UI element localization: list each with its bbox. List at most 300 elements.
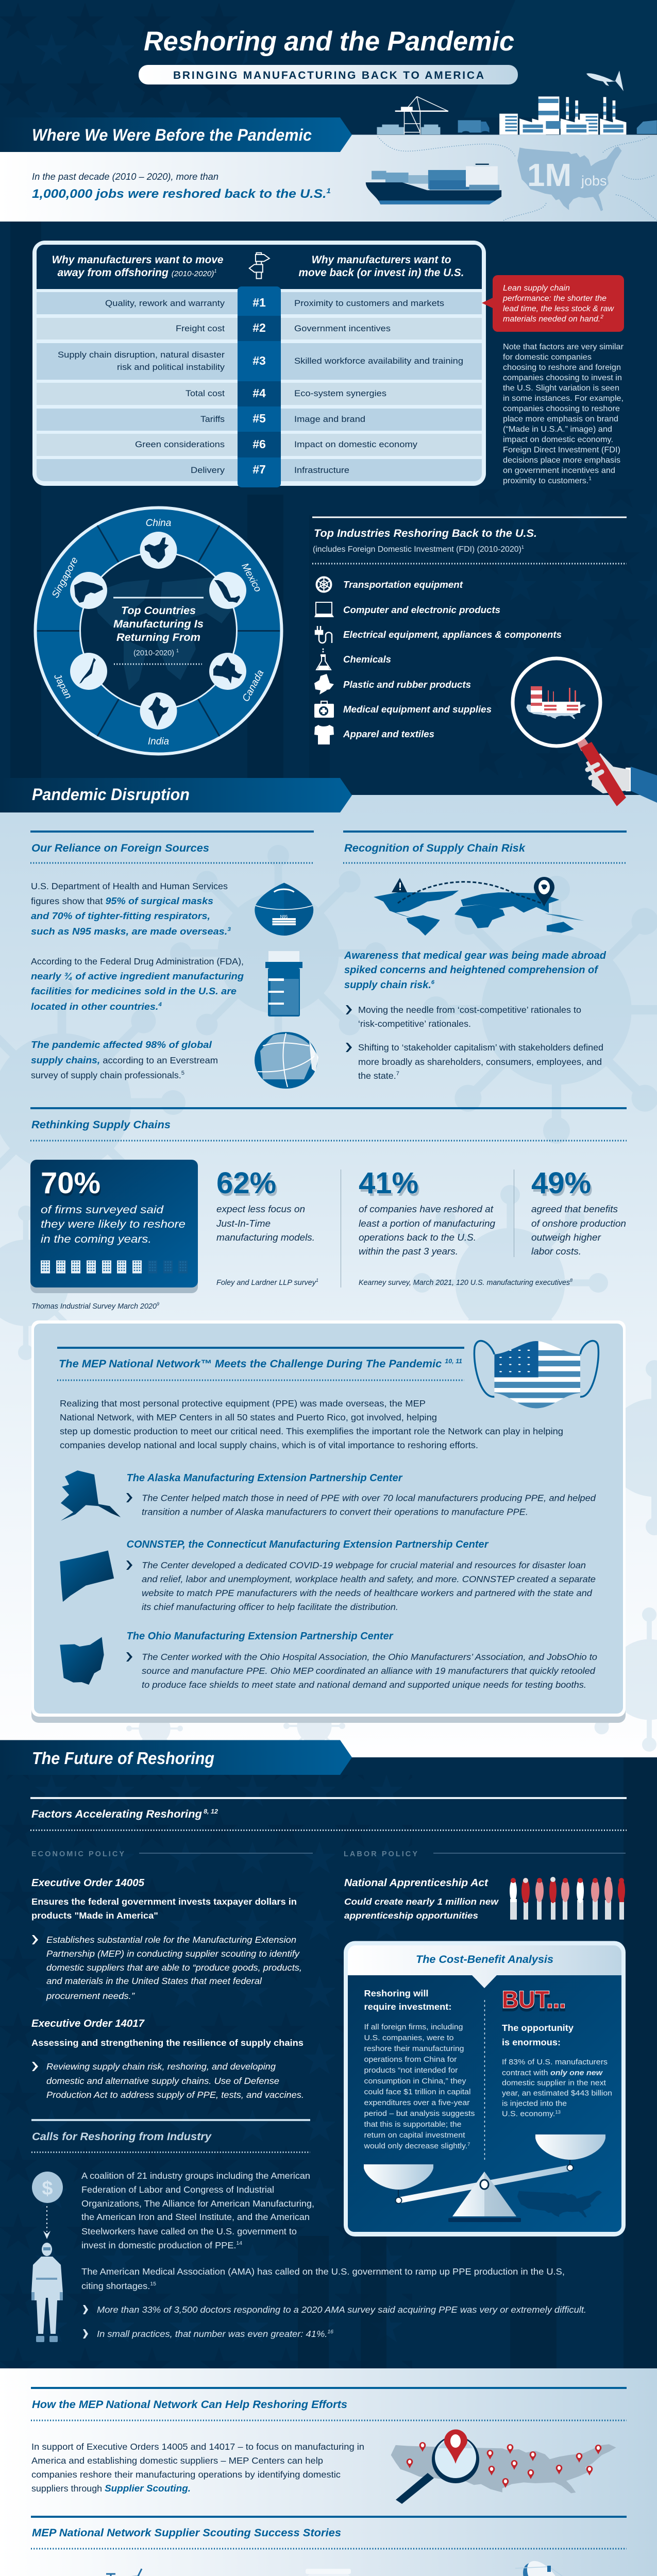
illustration: magnifying glass over U.S. factory bbox=[513, 658, 657, 806]
text: American Medical Association bbox=[81, 2266, 565, 2291]
dark section background: future of reshoring bbox=[0, 1757, 657, 2368]
illustration: vial on Virginia bbox=[242, 2569, 402, 2576]
subtitle pill bbox=[139, 65, 518, 84]
text: surgical masks statistic: 3 bbox=[227, 926, 231, 933]
statistic: 41 percent: least a portion of manufacturing bbox=[359, 1218, 495, 1229]
rank column: #1 bbox=[252, 296, 266, 309]
list: top industries: Transportation equipment bbox=[343, 579, 463, 590]
heading: calls for reshoring from industry bbox=[31, 2119, 310, 2153]
text: note on factors: decisions place more emphasis bbox=[503, 456, 620, 465]
wheel centre title: Top Countries bbox=[121, 605, 196, 617]
rank column: #7 bbox=[252, 463, 266, 476]
heading band: where we were before the pandemic: Where We Were Before the Pandemic bbox=[32, 126, 312, 144]
reasons to move back to the U.S.: Impact on domestic economy bbox=[294, 439, 418, 449]
text: active ingredient statistic: 4 bbox=[158, 1002, 162, 1008]
panel heading: 10, 11 bbox=[445, 1358, 462, 1365]
text: note on factors: in some instances. For example, bbox=[503, 394, 624, 403]
text: awareness of medical gear risk: 6 bbox=[431, 979, 435, 986]
table header bbox=[37, 245, 482, 289]
wheel centre title: Returning From bbox=[116, 632, 200, 643]
text: supplier scouting: America and establishing domestic suppliers – MEP Centers can help bbox=[31, 2455, 323, 2466]
center: CONNSTEP: website to match PPE manufacturers with the needs of healthcare workers and partnered with the state and bbox=[142, 1588, 593, 1598]
text: industry coalition: the American Iron and Steel Institute, and the American bbox=[81, 2212, 310, 2222]
panel intro text: National Network, with MEP Centers in all 50 states and Puerto Rico, got involved, helping bbox=[60, 1412, 437, 1422]
illustration: balance scale bbox=[364, 2134, 605, 2222]
heading: top industries: 1 bbox=[521, 545, 524, 550]
heading band: the future of reshoring bbox=[0, 1740, 352, 1775]
policy: executive order 14005: procurement needs.” bbox=[46, 1991, 135, 2001]
icon: wheel bbox=[316, 577, 331, 591]
panel intro text bbox=[60, 1398, 563, 1450]
rank column: #6 bbox=[252, 437, 266, 451]
light section background: pandemic disruption bbox=[0, 795, 657, 1757]
intro text: one million jobs: 1,000,000 jobs were reshored back to the U.S. bbox=[32, 187, 300, 201]
wheel centre title: Manufacturing Is bbox=[113, 618, 204, 630]
reasons to move back to the U.S.: Skilled workforce availability and training bbox=[294, 356, 463, 366]
panel heading: The MEP National Network™ Meets the Challenge During The Pandemic bbox=[59, 1358, 428, 1370]
title: Reshoring and the Pandemic bbox=[144, 26, 514, 57]
reasons to move back to the U.S.: Infrastructure bbox=[294, 465, 349, 475]
center: Ohio MEP: The Center worked with the Ohio Hospital Association, the Ohio Manufacturers’ Association, and JobsOhio to bbox=[142, 1652, 597, 1662]
rank column: #4 bbox=[252, 386, 266, 400]
policy: executive order 14017 bbox=[31, 2018, 304, 2100]
text: surgical masks statistic: figures show that 95% of surgical masks bbox=[31, 895, 213, 906]
center: Alaska MEP: The Center helped match those in need of PPE with over 70 local manufacturers producing PPE, and helped bbox=[142, 1493, 596, 1503]
statistic: 41 percent: of companies have reshored at bbox=[359, 1204, 494, 1214]
heading: how the MEP National Network can help: How the MEP National Network Can Help Reshoring Efforts bbox=[32, 2399, 347, 2411]
text: industry coalition: A coalition of 21 industry groups including the American bbox=[81, 2171, 310, 2181]
list: top industries bbox=[343, 579, 562, 739]
source: Kearney survey: 8 bbox=[570, 1278, 572, 1283]
text: 98 percent of global supply chains bbox=[31, 1039, 218, 1080]
bullet: small practices: In small practices, that number was even greater: 41%. bbox=[97, 2329, 317, 2339]
text: industry coalition: invest in domestic production of PPE. bbox=[81, 2240, 231, 2250]
heading band: where we were before the pandemic bbox=[0, 117, 352, 152]
text: surgical masks statistic: and 70% of tighter-fitting respirators, bbox=[31, 910, 210, 921]
callout: lean supply chain: performance: the shorter the bbox=[502, 294, 607, 303]
reasons to move away from offshoring bbox=[58, 298, 225, 475]
text: active ingredient statistic: located in other countries. bbox=[31, 1001, 150, 1012]
heading: recognition of supply chain risk bbox=[343, 831, 627, 863]
callout: lean supply chain: Lean supply chain bbox=[503, 284, 570, 293]
subtitle pill: BRINGING MANUFACTURING BACK TO AMERICA bbox=[173, 70, 484, 81]
list: top industries: Chemicals bbox=[343, 654, 391, 665]
icon: dollar coin: $ bbox=[42, 2178, 53, 2199]
reasons to move away from offshoring: Green considerations bbox=[135, 439, 225, 449]
policy: executive order 14017: Production Act to address supply of PPE, tests, and vaccines. bbox=[46, 2090, 304, 2100]
reasons to move away from offshoring: risk and political instability bbox=[117, 362, 225, 372]
policy: national apprenticeship act: National Apprenticeship Act bbox=[344, 1877, 488, 1889]
policy: national apprenticeship act: apprenticeship opportunities bbox=[344, 1910, 478, 1921]
text: active ingredient statistic: nearly ¾ of active ingredient manufacturing bbox=[31, 971, 244, 981]
arrow: coin to health worker bbox=[43, 2206, 50, 2239]
statistic: 62 percent: manufacturing models. bbox=[216, 1232, 315, 1243]
right column: the opportunity is enormous: is injected into the bbox=[502, 2099, 567, 2108]
table rows bbox=[37, 292, 482, 481]
bullet: stakeholder capitalism: more broadly as shareholders, consumers, employees, and bbox=[358, 1057, 602, 1067]
heading: factors accelerating reshoring bbox=[30, 1797, 627, 1830]
country labels: Singapore bbox=[50, 555, 80, 600]
illustration: bicycle on Ohio bbox=[77, 2569, 170, 2576]
icon: Connecticut bbox=[60, 1551, 114, 1602]
statistic: 41 percent: within the past 3 years. bbox=[359, 1246, 458, 1257]
icon: puzzle globe bbox=[255, 1032, 318, 1089]
panel intro text: Realizing that most personal protective equipment (PPE) was made overseas, the MEP bbox=[60, 1398, 426, 1409]
center: Ohio MEP: source and manufacture PPE. Ohio MEP coordinated an alliance with 19 manufacturers that quickly retooled bbox=[142, 1666, 596, 1676]
heading: our reliance on foreign sources: Our Reliance on Foreign Sources bbox=[31, 842, 209, 854]
table header: 1 bbox=[214, 268, 216, 274]
statistic: 41 percent: 41% bbox=[360, 1169, 420, 1202]
country markers bbox=[70, 532, 246, 730]
policy: executive order 14017: Executive Order 14017 bbox=[31, 2018, 145, 2029]
reasons to move away from offshoring: Tariffs bbox=[200, 414, 225, 424]
text: industry coalition: Organizations, The Alliance for American Manufacturing, bbox=[81, 2198, 314, 2209]
right column: the opportunity is enormous: The opportunity bbox=[502, 2023, 574, 2033]
statistic: 49 percent: 49% bbox=[531, 1166, 591, 1200]
text: surgical masks statistic: U.S. Department of Health and Human Services bbox=[31, 881, 228, 891]
icon: N95 mask bbox=[255, 883, 313, 936]
illustration: U.S. map with pins and magnifier bbox=[391, 2430, 616, 2504]
list: top industries: Computer and electronic products bbox=[343, 604, 500, 615]
panel heading bbox=[57, 1347, 464, 1380]
light panel: where we were bbox=[0, 135, 657, 222]
card: 70 percent statistic: they were likely to reshore bbox=[41, 1218, 186, 1230]
heading band: the future of reshoring: The Future of Reshoring bbox=[32, 1749, 214, 1768]
statistic: 62 percent: 62% bbox=[218, 1169, 278, 1202]
reasons to move back to the U.S.: Eco-system synergies bbox=[294, 388, 386, 398]
text: note on factors: on government incentives and bbox=[503, 466, 615, 475]
center: Alaska MEP bbox=[126, 1472, 596, 1517]
illustration: world map with route and pins bbox=[374, 877, 584, 936]
text: active ingredient statistic: According to the Federal Drug Administration (FDA), bbox=[31, 956, 244, 967]
country labels bbox=[50, 518, 266, 747]
statistic: 62 percent: Just-In-Time bbox=[216, 1218, 271, 1229]
text: 98 percent of global supply chains: survey of supply chain professionals. bbox=[31, 1070, 178, 1080]
bullet: stakeholder capitalism bbox=[346, 1042, 603, 1081]
illustration: cargo ship bbox=[366, 162, 501, 205]
icon: pill bottle bbox=[265, 951, 302, 1016]
callout: lean supply chain: lead time, the less stock & raw bbox=[503, 304, 615, 313]
statistic: 62 percent: expect less focus on bbox=[216, 1204, 305, 1214]
reasons to move away from offshoring: Supply chain disruption, natural disaster bbox=[58, 350, 225, 360]
panel header bbox=[348, 1945, 621, 1988]
illustration: U.S. map with 1M jobs bbox=[517, 146, 621, 211]
wheel centre title bbox=[113, 597, 204, 664]
text: note on factors: for domestic companies bbox=[503, 353, 592, 362]
heading: factors accelerating reshoring: Factors Accelerating Reshoring bbox=[31, 1808, 195, 1820]
left column: reshoring will require investment: could face $1 trillion in capital bbox=[364, 2088, 471, 2096]
bullet: small practices: 16 bbox=[327, 2329, 333, 2335]
list: top industries: Plastic and rubber products bbox=[343, 679, 471, 690]
list: top industries: Electrical equipment, appliances & components bbox=[343, 629, 562, 640]
bullet: stakeholder capitalism: 7 bbox=[396, 1071, 399, 1077]
text: American Medical Association: 15 bbox=[150, 2281, 156, 2287]
policy: executive order 14005: Establishes substantial role for the Manufacturing Extension bbox=[46, 1935, 296, 1945]
center: Ohio MEP bbox=[126, 1631, 597, 1690]
heading: rethinking supply chains: Rethinking Supply Chains bbox=[31, 1119, 171, 1131]
wheel centre title: (2010-2020) bbox=[133, 649, 174, 657]
reasons to move back to the U.S. bbox=[294, 298, 463, 475]
country labels: China bbox=[146, 518, 171, 529]
center: CONNSTEP: its chief manufacturing officer to help facilitate the distribution. bbox=[142, 1602, 398, 1612]
text: awareness of medical gear risk: supply chain risk. bbox=[344, 979, 431, 991]
icon: N95 mask: N95 bbox=[280, 914, 288, 919]
text: note on factors: 1 bbox=[588, 476, 592, 482]
reasons to move away from offshoring: Quality, rework and warranty bbox=[105, 298, 225, 308]
icon: plug bbox=[315, 626, 332, 643]
country labels: Canada bbox=[241, 668, 266, 704]
illustration: port and factory skyline bbox=[377, 96, 657, 134]
text: awareness of medical gear risk bbox=[344, 950, 607, 991]
right column: the opportunity is enormous: is enormous: bbox=[502, 2037, 561, 2047]
right column: the opportunity is enormous: If 83% of U.S. manufacturers bbox=[502, 2058, 608, 2066]
left column: reshoring will require investment: expenditures over a five-year bbox=[364, 2098, 470, 2107]
intro text: one million jobs: In the past decade (2010 – 2020), more than bbox=[32, 172, 218, 182]
text: industry coalition: Federation of Labor and Congress of Industrial bbox=[81, 2184, 274, 2195]
heading: how the MEP National Network can help bbox=[31, 2387, 627, 2420]
faint world map behind wheel centre bbox=[93, 577, 237, 690]
text: supplier scouting: companies reshore their manufacturing operations by identifying domestic bbox=[31, 2469, 341, 2480]
source: Thomas Industrial: 9 bbox=[157, 1301, 159, 1307]
statistic: 49 percent: labor costs. bbox=[531, 1246, 581, 1257]
heading: top industries: (includes Foreign Domestic Investment (FDI) (2010-2020) bbox=[313, 545, 517, 554]
heading: recognition of supply chain risk: Recognition of Supply Chain Risk bbox=[344, 842, 526, 854]
text: awareness of medical gear risk: Awareness that medical gear was being made abroad bbox=[344, 950, 607, 961]
panel: table of reasons bbox=[32, 241, 486, 487]
text: surgical masks statistic bbox=[31, 881, 231, 937]
panel intro text: companies develop national and local supply chains, which is of vital importance to reshoring efforts. bbox=[60, 1440, 478, 1450]
heading band: pandemic disruption: Pandemic Disruption bbox=[32, 785, 190, 804]
center: Ohio MEP: The Ohio Manufacturing Extension Partnership Center bbox=[127, 1631, 394, 1642]
text: note on factors: companies choosing to reshore bbox=[503, 404, 620, 413]
statistic: 41 percent: operations back to the U.S. bbox=[359, 1232, 476, 1243]
table header: away from offshoring (2010-2020) bbox=[58, 267, 214, 279]
icon: signpost bbox=[249, 253, 269, 279]
text: note on factors: impact on domestic economy. bbox=[503, 435, 613, 444]
policy: executive order 14017: domestic and alternative supply chains. Use of Defense bbox=[46, 2076, 279, 2086]
statistic: 49 percent: 49% bbox=[533, 1169, 593, 1202]
intro text: one million jobs: 1 bbox=[326, 187, 331, 195]
left column: reshoring will require investment bbox=[363, 1988, 475, 2150]
text: industry coalition: 14 bbox=[236, 2241, 242, 2246]
reasons to move back to the U.S.: Image and brand bbox=[294, 414, 365, 424]
text: supplier scouting bbox=[31, 2442, 364, 2494]
panel intro text: step up domestic production to meet our critical need. This exemplifies the important role the Network can play in helping bbox=[60, 1426, 563, 1436]
left column: reshoring will require investment: period – but analysis suggests bbox=[364, 2109, 475, 2118]
callout: lean supply chain: materials needed on hand. bbox=[503, 315, 598, 324]
policy: executive order 14005: Executive Order 14005 bbox=[31, 1877, 145, 1889]
policy: executive order 14017: Reviewing supply chain risk, reshoring, and developing bbox=[46, 2061, 276, 2072]
source: Thomas Industrial: Thomas Industrial Survey March 2020 bbox=[31, 1302, 158, 1311]
icon row: seven of ten buildings bbox=[41, 1260, 188, 1274]
panel: MEP National Network meets the challenge bbox=[31, 1320, 626, 1723]
country labels: Japan bbox=[52, 672, 74, 701]
right column: the opportunity is enormous: domestic supplier in the next bbox=[502, 2078, 607, 2088]
heading: supplier scouting success stories bbox=[31, 2516, 627, 2549]
illustration: dotted arrows to U.S. map bbox=[378, 136, 657, 221]
left column: reshoring will require investment: reshore their manufacturing bbox=[364, 2044, 464, 2053]
table header: Why manufacturers want to move bbox=[52, 254, 224, 266]
country labels: Mexico bbox=[239, 562, 263, 594]
text: note on factors: choosing to reshore and foreign bbox=[503, 363, 621, 372]
text: note on factors: the U.S. Slight variation is seen bbox=[503, 384, 619, 393]
reasons to move back to the U.S.: Proximity to customers and markets bbox=[294, 298, 444, 308]
left column: reshoring will require investment: require investment: bbox=[364, 2002, 451, 2012]
left column: reshoring will require investment: If all foreign firms, including bbox=[364, 2023, 463, 2031]
icon: flask bbox=[316, 648, 331, 670]
statistic: 49 percent bbox=[531, 1166, 626, 1257]
text: 98 percent of global supply chains: supply chains, according to an Everstream bbox=[31, 1055, 218, 1065]
icon: airplane bbox=[586, 71, 624, 91]
left column: reshoring will require investment: Reshoring will bbox=[364, 1988, 429, 1998]
policy: executive order 14005: and materials in the United States that meet federal bbox=[46, 1976, 262, 1986]
statistic: 49 percent: of onshore production bbox=[531, 1218, 626, 1229]
list: top industries: Apparel and textiles bbox=[343, 728, 434, 739]
wheel centre title: 1 bbox=[176, 648, 179, 653]
text: industry coalition bbox=[81, 2171, 314, 2250]
text: note on factors: place more emphasis on brand bbox=[503, 415, 618, 423]
illustration: U.S. map with 1M jobs: 1M bbox=[527, 158, 571, 193]
statistic: 41 percent bbox=[359, 1166, 495, 1257]
rank column bbox=[238, 286, 281, 487]
left column: reshoring will require investment: that this is supportable; the bbox=[364, 2120, 462, 2129]
icon: Alaska bbox=[61, 1470, 121, 1521]
heading: rethinking supply chains bbox=[30, 1107, 627, 1141]
callout: lean supply chain bbox=[482, 275, 624, 332]
heading band: pandemic disruption bbox=[0, 778, 352, 812]
center: Alaska MEP: The Alaska Manufacturing Extension Partnership Center bbox=[127, 1472, 403, 1484]
reasons to move away from offshoring: Freight cost bbox=[176, 324, 225, 333]
card: 70 percent statistic: of firms surveyed said bbox=[41, 1204, 164, 1216]
label: labor policy: LABOR POLICY bbox=[344, 1850, 417, 1858]
left column: reshoring will require investment: operations from China for bbox=[364, 2055, 457, 2064]
left column: reshoring will require investment: 7 bbox=[467, 2142, 470, 2147]
text: active ingredient statistic bbox=[31, 956, 244, 1012]
icon: shirt bbox=[314, 725, 334, 744]
heading: top industries bbox=[312, 516, 627, 564]
text: 98 percent of global supply chains: 5 bbox=[181, 1070, 184, 1076]
panel: the cost-benefit analysis bbox=[344, 1941, 626, 2236]
right column: the opportunity is enormous: year, an estimated $443 billion bbox=[502, 2089, 612, 2098]
left column: reshoring will require investment: would only decrease slightly. bbox=[364, 2142, 462, 2150]
center: CONNSTEP: CONNSTEP, the Connecticut Manufacturing Extension Partnership Center bbox=[127, 1539, 489, 1550]
text: American Medical Association: The American Medical Association (AMA) has called on the U.S. government to ramp up PPE production in the U.S, bbox=[81, 2266, 565, 2277]
rank column: #2 bbox=[252, 321, 266, 334]
source: Foley and Lardner: Foley and Lardner LLP survey bbox=[216, 1279, 316, 1287]
illustration: satellite dish on Colorado bbox=[487, 2555, 595, 2576]
heading: our reliance on foreign sources bbox=[30, 831, 314, 863]
statistic: 41 percent: 41% bbox=[359, 1166, 418, 1200]
text: note on factors: Note that factors are very similar bbox=[503, 343, 624, 351]
heading: top industries: Top Industries Reshoring Back to the U.S. bbox=[314, 528, 537, 539]
card: 70 percent statistic: 70% bbox=[41, 1166, 100, 1200]
text: American Medical Association: citing shortages. bbox=[81, 2281, 147, 2291]
text: note on factors: Foreign Direct Investment (FDI) bbox=[503, 446, 620, 454]
left column: reshoring will require investment: products “not intended for bbox=[364, 2066, 458, 2075]
country labels: India bbox=[148, 736, 169, 747]
center: CONNSTEP: and relief, labor and unemployment, workplace health and safety, and more. CONNSTEP created a separate bbox=[142, 1574, 596, 1584]
text: note on factors: companies choosing to invest in bbox=[503, 374, 622, 382]
text: surgical masks statistic: such as N95 masks, are made overseas. bbox=[31, 926, 213, 937]
reasons to move away from offshoring: Delivery bbox=[191, 465, 225, 475]
source: Foley and Lardner: 1 bbox=[316, 1278, 318, 1283]
chart: top countries wheel bbox=[35, 508, 281, 754]
icon: Ohio bbox=[60, 1637, 104, 1685]
statistic: 62 percent: 62% bbox=[216, 1166, 276, 1200]
bullet: cost to risk competitive bbox=[346, 1005, 581, 1029]
center: CONNSTEP: The Center developed a dedicated COVID-19 webpage for crucial material and resources for disaster loan bbox=[142, 1560, 586, 1570]
policy: executive order 14005: domestic suppliers that are able to “produce goods, products, bbox=[46, 1962, 302, 1973]
divider: dashed centre line bbox=[484, 2000, 485, 2161]
card: 70 percent statistic: 70% bbox=[42, 1169, 102, 1202]
bullet: cost to risk competitive: ‘risk-competitive’ rationales. bbox=[358, 1019, 471, 1029]
rank column: #3 bbox=[252, 354, 266, 367]
callout: BUT: BUT... bbox=[502, 1986, 566, 2013]
right column: the opportunity is enormous bbox=[502, 2023, 612, 2119]
icon: medical case bbox=[314, 701, 334, 718]
policy: executive order 14005: products "Made in America" bbox=[31, 1910, 158, 1921]
table header: move back (or invest in) the U.S. bbox=[299, 267, 464, 279]
center: Ohio MEP: to produce face shields to meet state and national demand and supported unique needs for testing booths. bbox=[142, 1680, 586, 1690]
card: 70 percent statistic bbox=[30, 1160, 198, 1293]
list: top industries: Medical equipment and supplies bbox=[343, 704, 492, 715]
text: 98 percent of global supply chains: The pandemic affected 98% of global bbox=[31, 1039, 212, 1050]
policy: national apprenticeship act: Could create nearly 1 million new bbox=[344, 1896, 499, 1907]
illustration: American flag mask bbox=[474, 1339, 598, 1410]
policy: executive order 14005 bbox=[31, 1877, 302, 2001]
text: supplier scouting: suppliers through Supplier Scouting. bbox=[31, 2483, 191, 2494]
left column: reshoring will require investment: U.S. companies, were to bbox=[364, 2033, 453, 2042]
statistic: 49 percent: agreed that benefits bbox=[531, 1204, 618, 1214]
bullet: stakeholder capitalism: Shifting to ‘stakeholder capitalism’ with stakeholders defined bbox=[358, 1042, 603, 1053]
right column: the opportunity is enormous: 13 bbox=[555, 2109, 561, 2114]
label: economic policy: ECONOMIC POLICY bbox=[31, 1850, 124, 1858]
text: note on factors: proximity to customers. bbox=[503, 477, 586, 485]
reasons to move back to the U.S.: Government incentives bbox=[294, 324, 391, 333]
callout: lean supply chain: 2 bbox=[600, 314, 603, 320]
card: 70 percent statistic: in the coming years. bbox=[41, 1233, 151, 1245]
illustration: U.S. map with 1M jobs: jobs bbox=[581, 173, 607, 189]
right column: the opportunity is enormous: U.S. economy. bbox=[502, 2109, 552, 2119]
heading: factors accelerating reshoring: 8, 12 bbox=[204, 1808, 218, 1815]
icon: laptop bbox=[314, 602, 334, 617]
text: industry coalition: Steelworkers have called on the U.S. government to bbox=[81, 2226, 297, 2236]
icon: dollar coin bbox=[32, 2172, 63, 2203]
reasons to move away from offshoring: Total cost bbox=[186, 388, 225, 398]
right column: the opportunity is enormous: contract with only one new bbox=[502, 2069, 603, 2077]
center: Alaska MEP: transition a number of Alaska manufacturers to convert their operations to manufacture PPE. bbox=[142, 1506, 528, 1517]
statistic: 62 percent bbox=[216, 1166, 315, 1243]
callout: BUT: BUT... bbox=[502, 1989, 566, 2015]
icon: gloves bbox=[314, 674, 334, 694]
heading: supplier scouting success stories: MEP National Network Supplier Scouting Success Stories bbox=[32, 2527, 341, 2539]
panel header: The Cost-Benefit Analysis bbox=[416, 1954, 553, 1965]
table header: Why manufacturers want to bbox=[311, 254, 451, 266]
illustration: row of apprentices bbox=[510, 1877, 625, 1920]
policy: executive order 14005: Ensures the federal government invests taxpayer dollars in bbox=[31, 1896, 297, 1907]
left column: reshoring will require investment: return on capital investment bbox=[364, 2131, 465, 2140]
icon: worker in protective suit bbox=[31, 2243, 63, 2342]
statistic: 49 percent: outweigh higher bbox=[531, 1232, 601, 1243]
bullet: cost to risk competitive: Moving the needle from ‘cost-competitive’ rationales to bbox=[358, 1005, 581, 1015]
bullet: stakeholder capitalism: the state. bbox=[358, 1071, 395, 1081]
heading: calls for reshoring from industry: Calls for Reshoring from Industry bbox=[32, 2131, 212, 2143]
text: note on factors: (“Made in U.S.A.” image) and bbox=[503, 425, 612, 434]
bullet: doctors survey: More than 33% of 3,500 doctors responding to a 2020 AMA survey said acquiring PPE was very or extremely difficult. bbox=[97, 2304, 586, 2315]
source: Kearney survey: Kearney survey, March 2021, 120 U.S. manufacturing executives bbox=[359, 1279, 574, 1287]
text: note on factors bbox=[503, 343, 624, 485]
text: awareness of medical gear risk: spiked concerns and heightened comprehension of bbox=[344, 964, 599, 976]
